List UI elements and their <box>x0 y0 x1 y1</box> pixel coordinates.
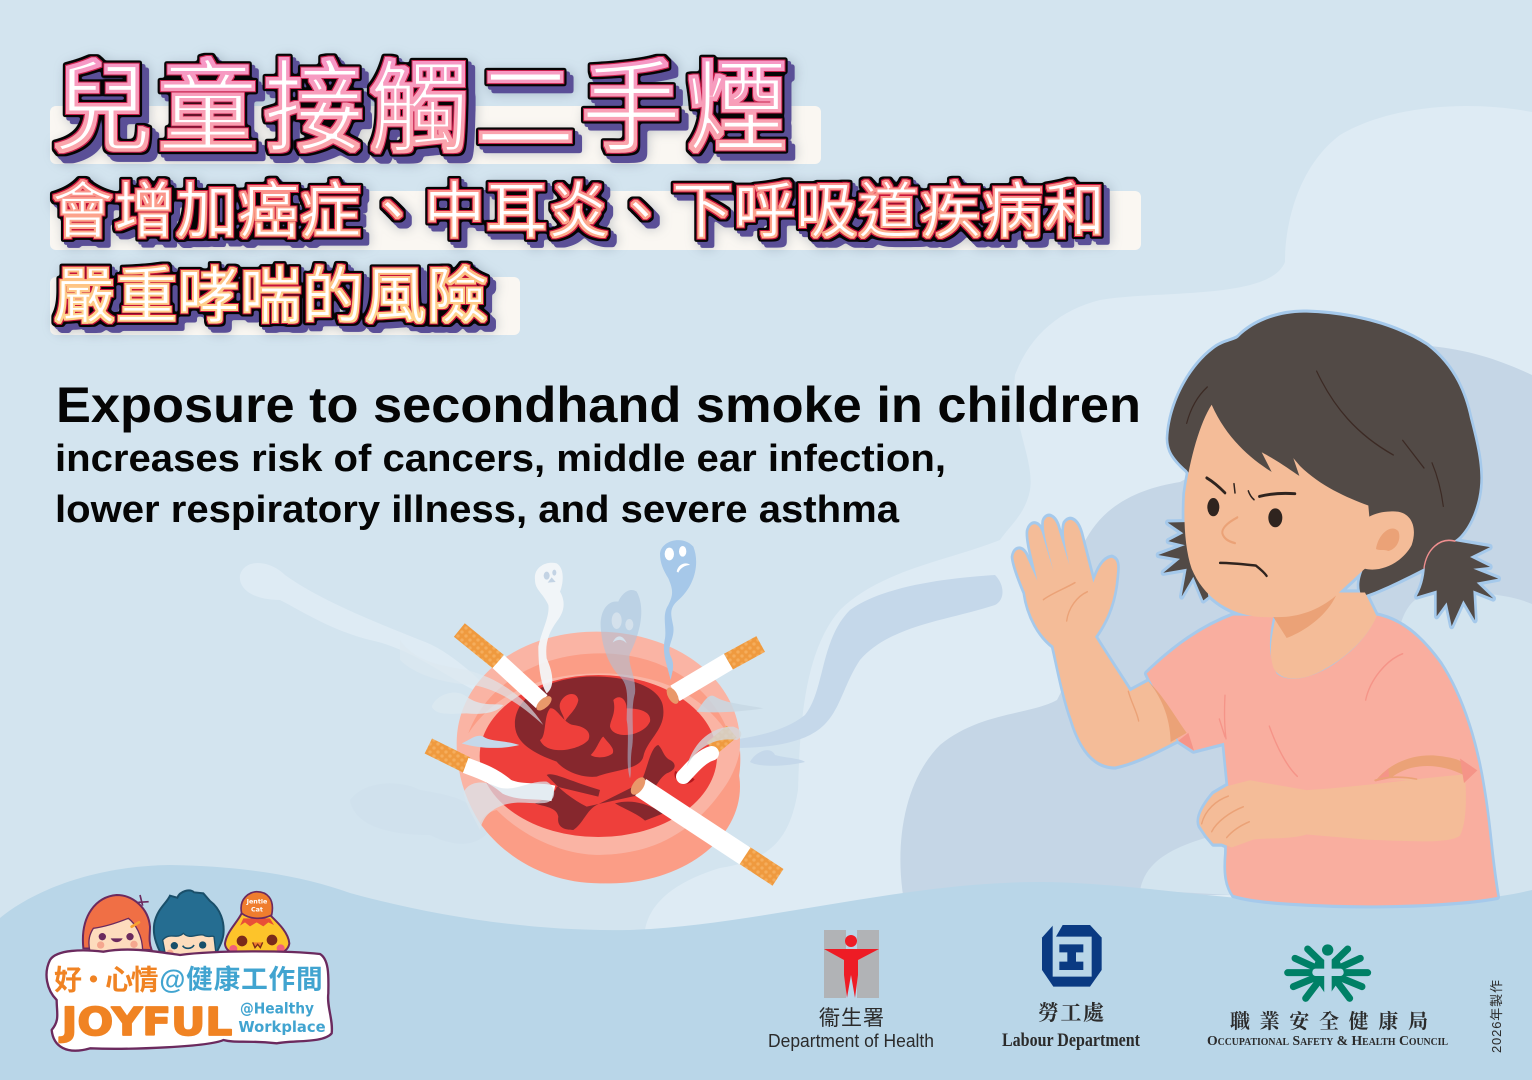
department Chinese name: 勞工處 <box>1038 1001 1104 1025</box>
department English name: Labour Department <box>1002 1030 1141 1051</box>
logo: Occupational Safety and Health Council <box>1207 944 1448 1049</box>
sign board <box>47 950 332 1051</box>
face: brows, eyes, nose and mouth <box>1207 478 1295 576</box>
logo: Labour Department <box>1002 924 1141 1051</box>
emblem <box>1042 924 1102 987</box>
department Chinese name: 衞生署 <box>819 1007 884 1030</box>
shadows and cuffs <box>1148 528 1477 783</box>
English subheading line 1: increases risk of cancers, middle ear infection, <box>55 438 946 480</box>
mascot: Jentle Cat: Cat <box>251 907 263 914</box>
illustration: angry girl raising hand <box>1013 313 1498 905</box>
ghost smoke: grey-blue <box>601 590 641 778</box>
logo: Joyful @ Healthy Workplace <box>47 890 332 1051</box>
cigarette top left <box>459 630 554 713</box>
title backing pills <box>50 106 1141 335</box>
title: Chinese line 1: 兒童接觸二手煙 <box>52 53 787 165</box>
logo Workplace: Workplace <box>238 1018 326 1036</box>
crease lines <box>1043 371 1455 838</box>
ghost smoke: white <box>535 563 564 693</box>
ashtray body <box>457 632 740 883</box>
logo Chinese name blue: @健康工作間 <box>159 965 323 995</box>
bottom wave band <box>0 865 1532 1080</box>
cigarette bottom right <box>628 775 778 877</box>
mascot: Jentle Cat <box>225 892 289 958</box>
cigarette top right <box>664 644 761 706</box>
logo Chinese name orange: 好‧心情 <box>54 964 159 995</box>
title: Chinese line 3: 嚴重哮喘的風險 <box>54 262 488 330</box>
emblem <box>1288 944 1368 1002</box>
smoke clouds over tray <box>400 640 763 830</box>
department English name: Department of Health <box>768 1031 934 1051</box>
logo @Healthy: @Healthy <box>240 999 314 1017</box>
skull and crossbones <box>515 677 675 830</box>
cigarette left <box>428 746 553 793</box>
title: Chinese line 2: 會增加癌症、中耳炎、下呼吸道疾病和 <box>52 177 1105 245</box>
council English name: Occupational Safety & Health Council <box>1207 1034 1448 1049</box>
emblem <box>824 930 879 998</box>
production year note: 2026年製作 <box>1489 980 1504 1053</box>
cigarette right <box>676 732 732 782</box>
sign board and wordmarks <box>47 950 332 1051</box>
body outline <box>1013 313 1498 905</box>
English heading: Exposure to secondhand smoke in children <box>56 377 1141 433</box>
mascot: boy <box>154 890 224 962</box>
logo JOYFUL: JOYFUL <box>58 1000 232 1045</box>
mascot: girl <box>83 895 152 952</box>
mascots <box>83 890 289 962</box>
logo: Department of Health <box>768 930 934 1051</box>
illustration: ashtray with cigarettes <box>400 540 778 883</box>
English subheading line 2: lower respiratory illness, and severe asthma <box>55 489 900 531</box>
mascot: Jentle Cat: Jentle <box>246 899 267 906</box>
ghost smoke: blue <box>660 540 696 680</box>
body fills <box>1013 313 1498 905</box>
smoke wisps <box>240 563 1003 844</box>
council Chinese name: 職業安全健康局 <box>1230 1010 1428 1033</box>
